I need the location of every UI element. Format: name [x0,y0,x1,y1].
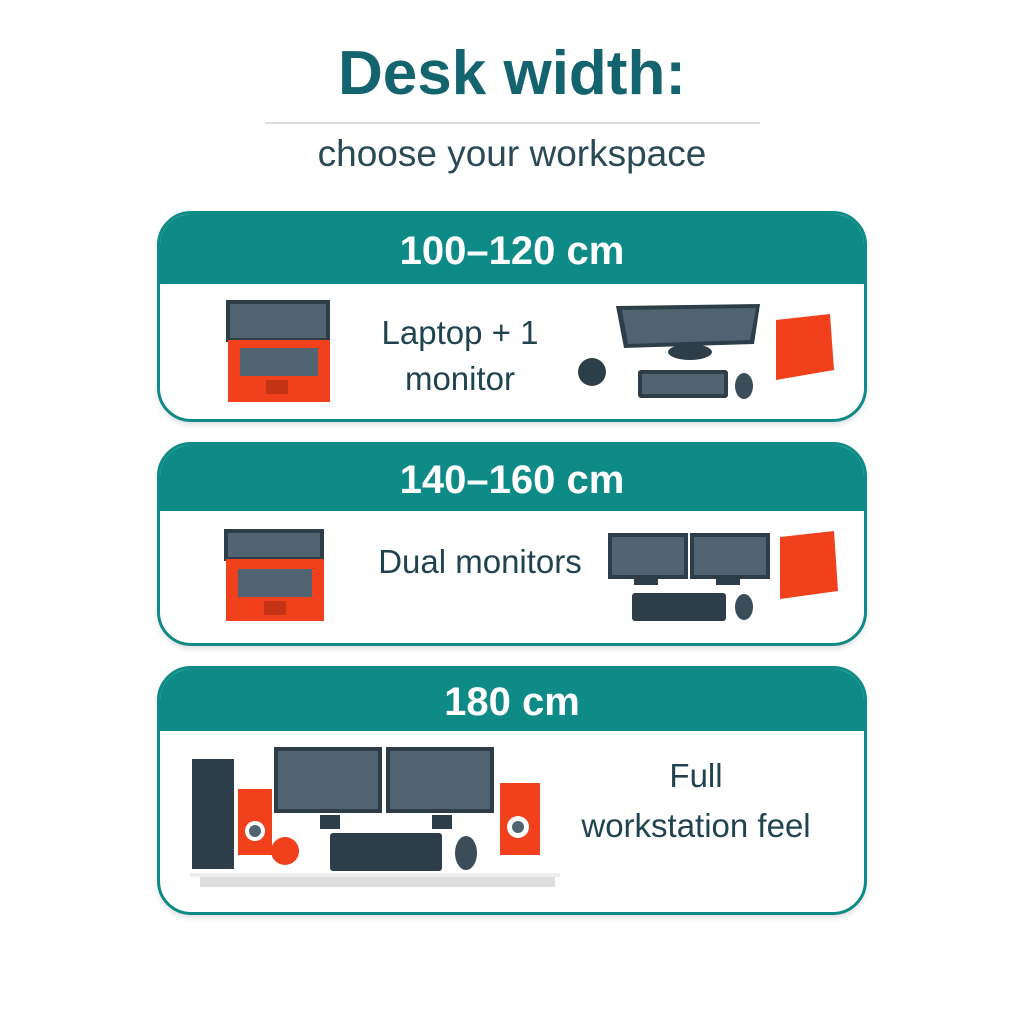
heading: 140-160 cm: 140–160 cm [400,458,624,502]
text: Dual monitors: Dual monitors [378,543,582,580]
heading: 180 cm [160,669,864,731]
text: Laptop + 1 monitor: Laptop + 1 [382,314,538,351]
icon: dual monitor setup [608,531,838,621]
panel: 140-160 cm [157,442,867,646]
icon: full workstation [190,747,560,887]
heading: 140-160 cm [160,445,864,511]
icon: laptop [224,529,324,621]
panel: 180 cm [157,666,867,915]
subtitle: choose your workspace [318,133,706,174]
icon: monitor setup [578,304,834,399]
heading: 100-120 cm [160,214,864,284]
text: Full workstation feel: workstation feel [581,807,811,844]
text: Laptop + 1 monitor [382,314,538,397]
icon: laptop [226,300,330,402]
text: Laptop + 1 monitor: monitor [405,360,515,397]
heading: 180 cm: 180 cm [444,680,580,724]
panel: 100-120 cm [157,211,867,422]
heading: 100-120 cm: 100–120 cm [400,229,624,273]
text: Full workstation feel: Full [669,757,723,794]
title: Desk width: [338,39,686,108]
text: Full workstation feel [581,757,811,844]
